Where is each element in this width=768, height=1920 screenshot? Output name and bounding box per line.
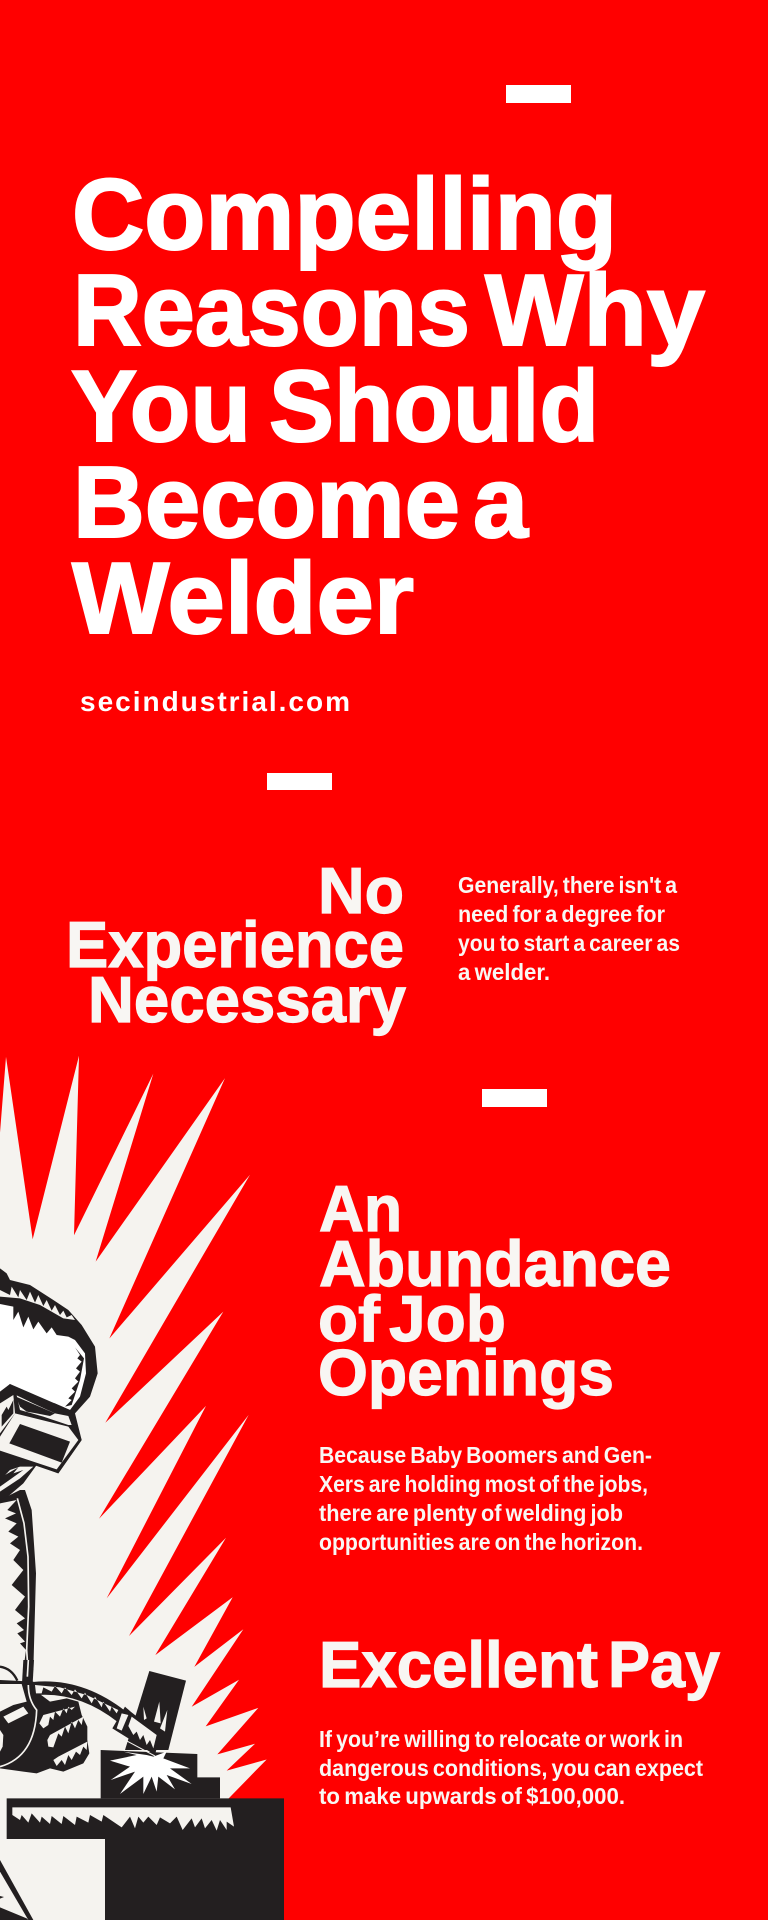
welder torso bbox=[0, 1490, 36, 1670]
text: no experience body bbox=[458, 872, 680, 985]
heading: no experience necessary: Experience bbox=[66, 908, 404, 981]
illustration: welder with sunburst bbox=[0, 1056, 284, 1920]
text: job openings body bbox=[319, 1442, 652, 1555]
title: Why bbox=[485, 255, 705, 367]
accent bar middle bbox=[482, 1089, 547, 1107]
text: excellent pay body: to make upwards of $100,000. bbox=[319, 1783, 625, 1809]
accent bar under url bbox=[267, 773, 332, 790]
heading: abundance of job openings: Openings bbox=[318, 1336, 614, 1409]
accent bar top bbox=[506, 85, 571, 103]
welder helmet bbox=[0, 1268, 98, 1503]
heading: excellent pay: Pay bbox=[608, 1628, 720, 1701]
title: Reasons bbox=[73, 255, 470, 367]
text: no experience body: need for a degree for bbox=[458, 901, 665, 927]
text: excellent pay body bbox=[319, 1726, 703, 1809]
text: no experience body: Generally, there isn't a bbox=[458, 872, 677, 898]
heading: no experience necessary bbox=[66, 854, 406, 1036]
title: Should bbox=[269, 351, 599, 463]
sunburst bbox=[0, 1056, 267, 1920]
title: a bbox=[473, 447, 529, 559]
heading: no experience necessary: No bbox=[318, 854, 404, 927]
text: job openings body: Because Baby Boomers and Gen- bbox=[319, 1442, 652, 1468]
title bbox=[71, 159, 705, 655]
welder gloved hand bbox=[0, 1660, 89, 1773]
heading: abundance of job openings: of bbox=[318, 1282, 380, 1355]
heading: excellent pay: Excellent bbox=[319, 1628, 598, 1701]
text: job openings body: there are plenty of welding job bbox=[319, 1500, 623, 1526]
text: no experience body: you to start a career as bbox=[458, 930, 680, 956]
title: Become bbox=[73, 447, 460, 559]
heading: abundance of job openings: Abundance bbox=[319, 1227, 671, 1300]
text: job openings body: Xers are holding most of the jobs, bbox=[319, 1471, 648, 1497]
text: excellent pay body: If you’re willing to relocate or work in bbox=[319, 1726, 683, 1752]
heading: abundance of job openings: An bbox=[319, 1172, 402, 1245]
text: excellent pay body: dangerous conditions, you can expect bbox=[319, 1755, 703, 1781]
title: You bbox=[71, 351, 251, 463]
title: Welder bbox=[72, 543, 414, 655]
heading: no experience necessary: Necessary bbox=[88, 963, 406, 1036]
heading: abundance of job openings bbox=[318, 1172, 671, 1409]
heading: abundance of job openings: Job bbox=[389, 1282, 506, 1355]
text: no experience body: a welder. bbox=[458, 959, 550, 985]
welder knee bbox=[0, 1860, 33, 1920]
title: Compelling bbox=[72, 159, 617, 271]
website url: secindustrial.com bbox=[80, 686, 350, 717]
welding torch, workpiece and workbench bbox=[7, 1671, 284, 1920]
text: job openings body: opportunities are on the horizon. bbox=[319, 1529, 643, 1555]
